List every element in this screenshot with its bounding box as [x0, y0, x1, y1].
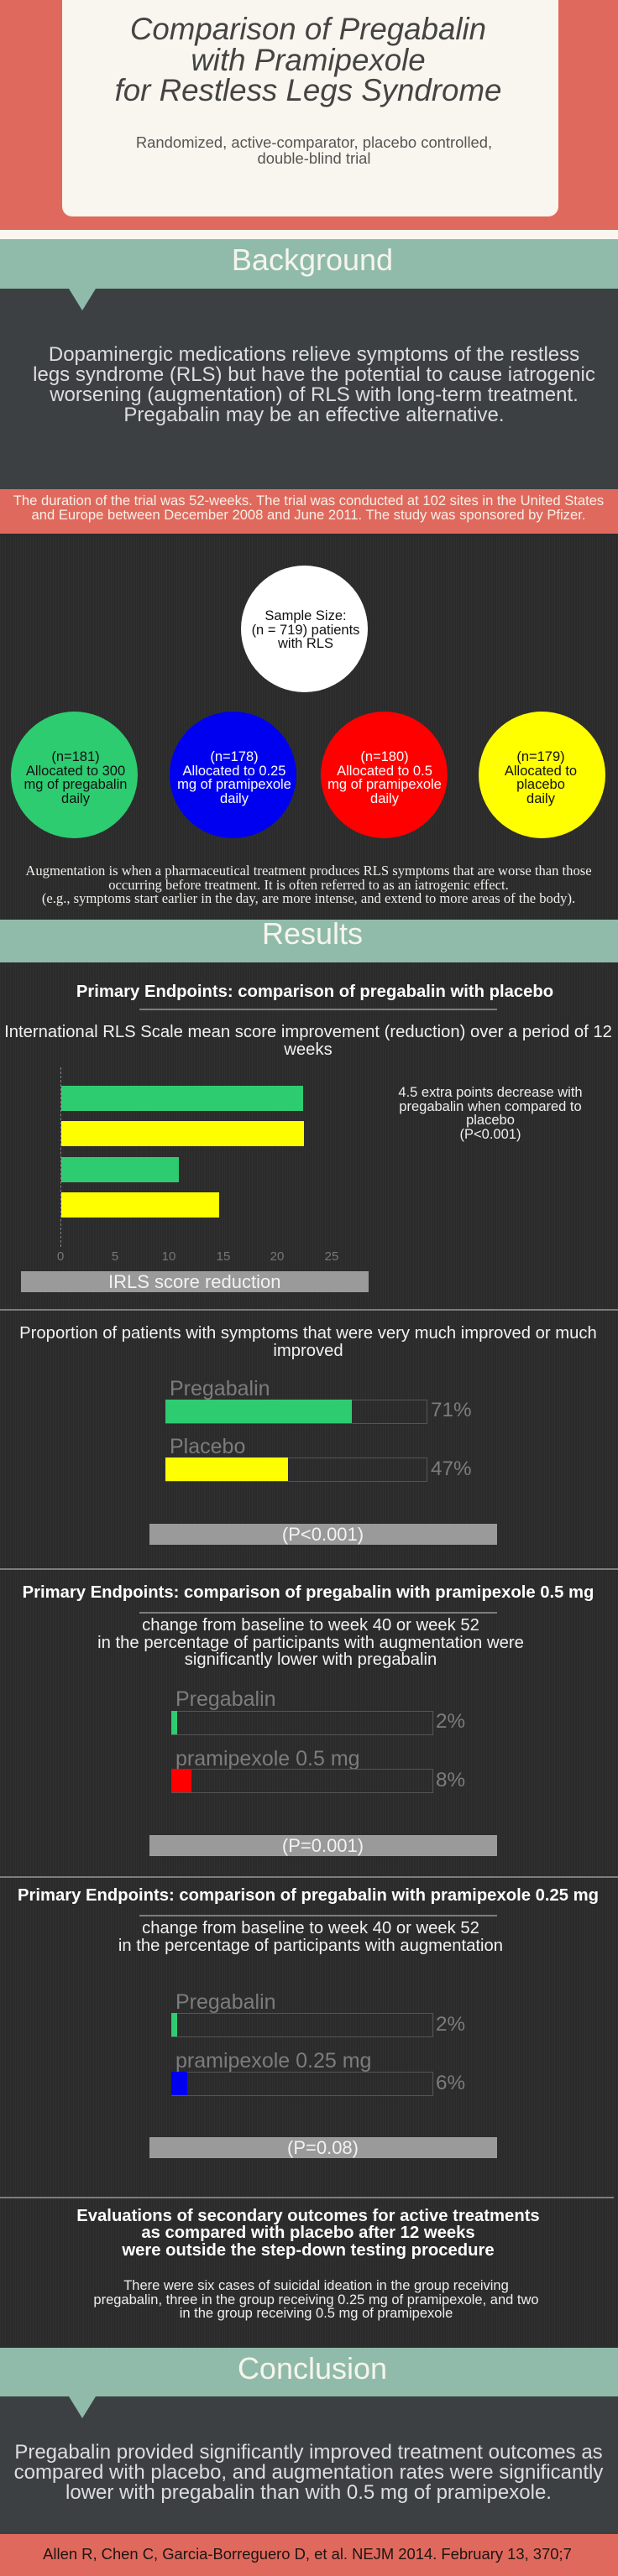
axis tick labels: 25	[325, 1249, 338, 1264]
augmentation description 0.5 mg: significantly lower with pregabalin	[185, 1650, 437, 1669]
proportion chart title: Proportion of patients with symptoms that were very much improved or much	[19, 1324, 597, 1343]
fill: pregabalin 2%	[171, 2013, 177, 2036]
conclusion panel	[0, 2396, 618, 2534]
trial details band	[0, 489, 618, 534]
p value bar	[149, 1524, 497, 1545]
trial details text: and Europe between December 2008 and June 2011. The study was sponsored by Pfizer.	[32, 507, 585, 522]
track: pramipexole 0.25 mg	[171, 2072, 433, 2096]
conclusion text: Pregabalin provided significantly improved treatment outcomes as	[14, 2441, 603, 2464]
bar: pregabalin 1	[61, 1086, 303, 1111]
arrow: conclusion pointer	[69, 2396, 96, 2418]
suicidal ideation note	[93, 2278, 539, 2321]
background text	[33, 343, 595, 426]
trial details text	[13, 493, 604, 522]
placebo group text: placebo	[516, 777, 565, 792]
placebo group text: daily	[526, 791, 555, 806]
pramipexole 0.25 group text: Allocated to 0.25	[183, 764, 285, 779]
p value bar: (P<0.001)	[282, 1524, 364, 1545]
label: pregabalin: Pregabalin	[170, 1377, 270, 1400]
label: pramipexole 0.25 mg: pramipexole 0.25 mg	[175, 2049, 371, 2073]
label: placebo: Placebo	[170, 1435, 245, 1458]
suicidal ideation note: pregabalin, three in the group receiving 0.25 mg of pramipexole, and two	[93, 2292, 539, 2307]
proportion chart title: improved	[273, 1341, 343, 1359]
heading: background: Background	[232, 242, 393, 277]
p value bar: (P=0.08)	[287, 2137, 359, 2158]
placebo group text	[505, 749, 577, 806]
track: pramipexole 0.5 mg	[171, 1769, 433, 1793]
title	[115, 12, 501, 107]
axis title bar: IRLS score reduction	[108, 1271, 280, 1292]
augmentation description 0.25 mg	[118, 1919, 503, 1955]
p value bar: (P=0.001)	[282, 1835, 364, 1856]
heading: secondary outcomes: Evaluations of secondary outcomes for active treatments	[76, 2207, 540, 2225]
label: pregabalin: Pregabalin	[175, 1990, 276, 2014]
heading: comparison with pramipexole 0.25 mg: Primary Endpoints: comparison of pregabalin with pramipexole 0.25 mg	[18, 1886, 599, 1905]
augmentation description 0.25 mg: change from baseline to week 40 or week 52	[142, 1919, 479, 1937]
augmentation definition: Augmentation is when a pharmaceutical treatment produces RLS symptoms that are worse than those	[25, 863, 592, 879]
cream stripe	[0, 230, 618, 239]
fill: pramipexole 6%	[171, 2072, 187, 2095]
augmentation description 0.5 mg: in the percentage of participants with augmentation were	[97, 1633, 524, 1651]
value: 47%: 47%	[431, 1457, 472, 1480]
axis tick labels: 20	[270, 1249, 284, 1264]
augmentation definition	[25, 863, 592, 906]
bar: pregabalin 2	[61, 1157, 179, 1182]
bar chart: IRLS score reduction	[60, 1067, 304, 1247]
trial details text: The duration of the trial was 52-weeks. The trial was conducted at 102 sites in the United States	[13, 493, 604, 508]
augmentation description 0.5 mg	[97, 1616, 524, 1669]
value: 6%: 6%	[436, 2072, 465, 2094]
heading: secondary outcomes	[76, 2207, 540, 2260]
axis tick labels: 5	[112, 1249, 118, 1264]
axis tick labels: 10	[162, 1249, 175, 1264]
progress chart: proportion improved	[165, 1377, 472, 1482]
track: pregabalin	[171, 1711, 433, 1735]
fill: pramipexole 8%	[171, 1769, 191, 1792]
heading: comparison with pramipexole 0.5 mg: Primary Endpoints: comparison of pregabalin with pramipexole 0.5 mg	[23, 1583, 594, 1602]
circle: sample size	[241, 566, 368, 692]
axis tick labels: 0	[57, 1249, 64, 1264]
progress chart: pramipexole 0.5 mg	[171, 1687, 465, 1793]
header panel	[0, 0, 618, 230]
side note: pregabalin when compared to	[399, 1099, 582, 1114]
heading: conclusion: Conclusion	[238, 2351, 387, 2386]
pregabalin group text: (n=181)	[51, 749, 100, 764]
pramipexole 0.5 group text: (n=180)	[360, 749, 409, 764]
bar: placebo 2	[61, 1192, 219, 1218]
sample size text: Sample Size:	[264, 608, 347, 623]
sample size text	[252, 608, 359, 651]
circle: pregabalin group	[11, 712, 138, 838]
bar: placebo 1	[61, 1121, 304, 1146]
pregabalin group text	[24, 749, 127, 806]
results heading band	[0, 920, 618, 962]
axis tick labels: 15	[217, 1249, 230, 1264]
title card	[62, 0, 558, 216]
progress chart: pramipexole 0.25 mg	[171, 1990, 465, 2096]
fill: pregabalin 2%	[171, 1711, 177, 1734]
background text: Dopaminergic medications relieve symptoms of the restless	[49, 343, 579, 366]
heading: secondary outcomes: were outside the step-down testing procedure	[122, 2241, 495, 2260]
side note	[398, 1085, 583, 1141]
background heading band	[0, 239, 618, 289]
title: with Pramipexole	[191, 42, 426, 77]
arrow: background pointer	[69, 289, 96, 310]
pregabalin group text: Allocated to 300	[26, 764, 125, 779]
subtitle: double-blind trial	[258, 149, 370, 167]
side note: placebo	[466, 1113, 515, 1128]
conclusion text: lower with pregabalin than with 0.5 mg of pramipexole.	[65, 2481, 552, 2504]
pramipexole 0.5 group text: mg of pramipexole	[327, 777, 442, 792]
placebo group text: (n=179)	[516, 749, 565, 764]
p value bar	[149, 2137, 497, 2158]
value: 2%: 2%	[436, 2013, 465, 2036]
value: 2%: 2%	[436, 1710, 465, 1733]
background text: Pregabalin may be an effective alternative.	[123, 404, 505, 426]
side note: (P<0.001)	[460, 1126, 521, 1141]
sample size text: with RLS	[278, 636, 333, 651]
background text: legs syndrome (RLS) but have the potential to cause iatrogenic	[33, 363, 595, 386]
axis tick labels	[57, 1249, 338, 1264]
pramipexole 0.25 group text	[177, 749, 291, 806]
track: pregabalin	[165, 1400, 427, 1424]
track: pregabalin	[171, 2013, 433, 2037]
value: 71%: 71%	[431, 1399, 472, 1421]
fill: pregabalin 71%	[165, 1400, 352, 1423]
conclusion heading band	[0, 2348, 618, 2396]
fill: placebo 47%	[165, 1457, 288, 1481]
track: placebo	[165, 1457, 427, 1482]
circle: pramipexole 0.5 group	[321, 712, 448, 838]
heading: results: Results	[262, 916, 363, 951]
conclusion text	[14, 2441, 603, 2504]
circle: pramipexole 0.25 group	[170, 712, 296, 838]
pramipexole 0.5 group text	[327, 749, 442, 806]
citation: Allen R, Chen C, Garcia-Borreguero D, et al. NEJM 2014. February 13, 370;7	[43, 2545, 572, 2563]
citation band	[0, 2534, 618, 2576]
background text: worsening (augmentation) of RLS with long-term treatment.	[50, 383, 579, 406]
subtitle	[136, 133, 492, 167]
subtitle: Randomized, active-comparator, placebo controlled,	[136, 133, 492, 151]
heading: comparison with placebo: Primary Endpoints: comparison of pregabalin with placebo	[76, 983, 553, 1001]
IRLS chart title: International RLS Scale mean score improvement (reduction) over a period of 12	[4, 1023, 612, 1041]
label: pregabalin: Pregabalin	[175, 1687, 276, 1711]
label: pramipexole 0.5 mg: pramipexole 0.5 mg	[175, 1747, 360, 1770]
pramipexole 0.25 group text: (n=178)	[210, 749, 259, 764]
side note: 4.5 extra points decrease with	[398, 1085, 583, 1100]
circle: placebo group	[479, 712, 605, 838]
p value bar	[149, 1835, 497, 1856]
IRLS chart title: weeks	[284, 1040, 333, 1059]
proportion chart title	[19, 1324, 597, 1359]
sample size text: (n = 719) patients	[252, 623, 359, 638]
heading: secondary outcomes: as compared with placebo after 12 weeks	[141, 2224, 475, 2242]
suicidal ideation note: There were six cases of suicidal ideation in the group receiving	[123, 2278, 509, 2293]
title: for Restless Legs Syndrome	[115, 73, 501, 107]
pregabalin group text: mg of pregabalin	[24, 777, 127, 792]
augmentation definition: occurring before treatment. It is often referred to as an iatrogenic effect.	[108, 877, 509, 893]
title: Comparison of Pregabalin	[130, 12, 486, 46]
pramipexole 0.5 group text: Allocated to 0.5	[337, 764, 432, 779]
placebo group text: Allocated to	[505, 764, 577, 779]
suicidal ideation note: in the group receiving 0.5 mg of pramipexole	[180, 2306, 453, 2321]
IRLS chart title	[4, 1023, 612, 1059]
augmentation description 0.5 mg: change from baseline to week 40 or week 52	[142, 1616, 479, 1635]
augmentation definition: (e.g., symptoms start earlier in the day, are more intense, and extend to more areas of the body).	[42, 890, 575, 906]
value: 8%: 8%	[436, 1769, 465, 1791]
pramipexole 0.25 group text: daily	[220, 791, 249, 806]
axis title bar	[20, 1271, 369, 1292]
pramipexole 0.25 group text: mg of pramipexole	[177, 777, 291, 792]
augmentation description 0.25 mg: in the percentage of participants with augmentation	[118, 1937, 503, 1955]
pramipexole 0.5 group text: daily	[370, 791, 399, 806]
conclusion text: compared with placebo, and augmentation rates were significantly	[14, 2461, 603, 2484]
pregabalin group text: daily	[61, 791, 90, 806]
background panel	[0, 289, 618, 489]
